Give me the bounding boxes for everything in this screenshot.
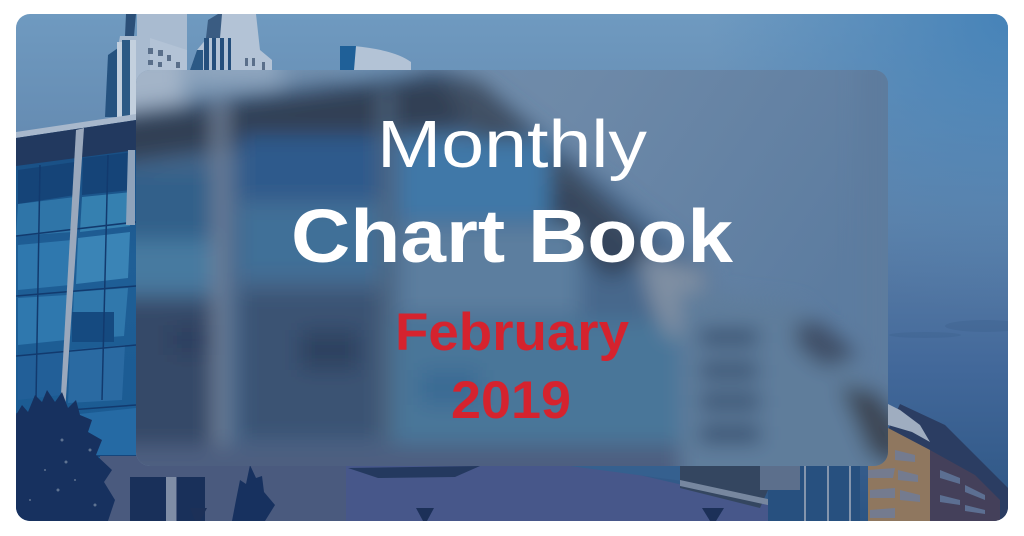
trees in the foreground xyxy=(16,390,275,521)
lower concrete wall xyxy=(100,456,768,521)
street lamps xyxy=(190,508,724,521)
main building glass facade xyxy=(16,114,136,466)
towers in the distance xyxy=(105,14,411,117)
date: 2019: 2019 xyxy=(451,371,571,430)
blurred building xyxy=(136,70,888,466)
clouds xyxy=(889,320,1024,338)
title: Monthly: Monthly xyxy=(377,107,648,182)
frosted glass panel xyxy=(136,70,888,466)
glass wing and right side building xyxy=(570,404,1008,521)
title: Chart Book: Chart Book xyxy=(291,194,733,278)
date: February: February xyxy=(395,303,630,362)
